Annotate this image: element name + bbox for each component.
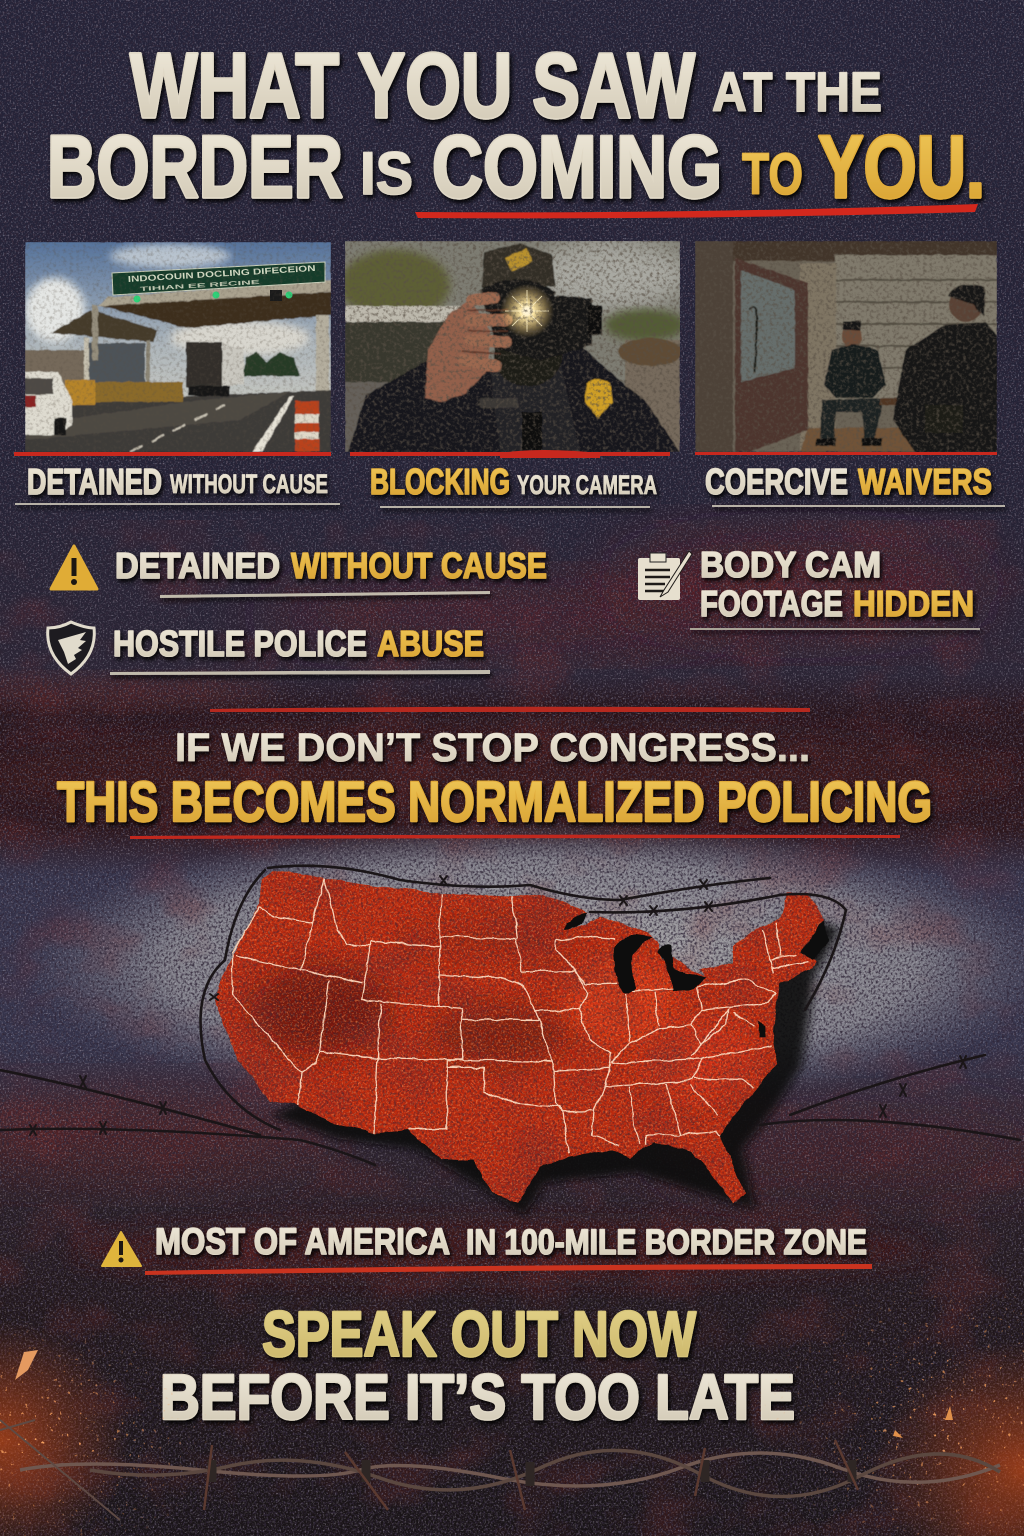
panel: agent blocking camera photo — [340, 240, 690, 452]
seated officer — [842, 329, 862, 347]
caption: coercive waivers: WAIVERS — [858, 461, 992, 502]
standing officer — [948, 296, 982, 322]
jacket — [348, 345, 680, 452]
warning banner — [57, 707, 932, 839]
map: United States with state lines — [0, 860, 1020, 1216]
call to action — [160, 1298, 795, 1433]
pickup — [25, 372, 72, 435]
caption: coercive waivers — [705, 461, 1005, 507]
call to action: SPEAK OUT NOW — [262, 1298, 696, 1370]
icon: clipboard — [638, 551, 692, 600]
title: BORDER — [47, 117, 343, 216]
door — [695, 241, 733, 452]
caption: detained without cause: WITHOUT CAUSE — [170, 469, 328, 499]
caption: coercive waivers: COERCIVE — [705, 461, 848, 502]
panel: border checkpoint photo: TIHIAN EE RECINE — [140, 280, 260, 293]
icon: warning triangle — [51, 546, 97, 589]
barriers — [95, 382, 183, 402]
left building — [25, 349, 85, 386]
caption: detained without cause: DETAINED — [27, 461, 162, 502]
icon: warning triangle small — [102, 1232, 141, 1266]
callout: 100-mile border zone: MOST OF AMERICA — [155, 1221, 450, 1262]
panel: border checkpoint photo — [25, 242, 331, 452]
item: hostile police abuse: ABUSE — [377, 623, 484, 664]
panel: border checkpoint photo: INDOCOUIN DOCLING DIFECEION — [128, 263, 316, 284]
road — [25, 390, 331, 452]
barbed wire footer — [0, 1420, 1000, 1520]
item: body cam footage hidden: FOOTAGE — [700, 583, 843, 624]
barrel — [295, 401, 319, 452]
warning banner: IF WE DON’T STOP CONGRESS... — [175, 726, 810, 770]
caption: blocking your camera: YOUR CAMERA — [517, 470, 657, 500]
trees — [243, 352, 300, 376]
callout: 100-mile border zone: IN 100-MILE BORDER ZONE — [466, 1223, 867, 1262]
caption: blocking your camera — [370, 461, 657, 508]
fire embers — [0, 1250, 1024, 1536]
sign — [112, 262, 325, 295]
great lakes — [564, 913, 830, 1037]
face and cap — [494, 348, 561, 386]
call to action: BEFORE IT’S TOO LATE — [160, 1361, 795, 1433]
camera — [489, 295, 592, 350]
caption: detained without cause — [15, 461, 340, 505]
red rules under photos — [14, 450, 997, 458]
barbed wire around map — [0, 866, 1020, 1165]
hand — [425, 300, 490, 402]
item: hostile police abuse — [110, 623, 490, 675]
callout: 100-mile border zone — [102, 1221, 872, 1275]
item: detained without cause: DETAINED — [115, 545, 280, 586]
map shadow — [272, 909, 840, 1216]
title: WHAT YOU SAW — [130, 35, 695, 137]
title: AT THE — [712, 60, 882, 123]
truck — [186, 342, 222, 387]
item: body cam footage hidden: HIDDEN — [853, 583, 974, 624]
item: detained without cause: WITHOUT CAUSE — [291, 545, 547, 586]
title: TO — [742, 142, 803, 207]
badge — [585, 380, 613, 418]
title: COMING — [432, 117, 722, 216]
canopy — [98, 292, 331, 328]
caption: blocking your camera: BLOCKING — [370, 461, 510, 502]
item: detained without cause — [115, 545, 547, 598]
icon: shield — [48, 622, 94, 674]
floor — [800, 426, 915, 452]
panel: coercive waivers photo — [695, 241, 997, 452]
state lines — [232, 878, 809, 1153]
item: hostile police abuse: HOSTILE POLICE — [113, 623, 367, 664]
title — [47, 35, 985, 216]
item: body cam footage hidden: BODY CAM — [700, 544, 881, 585]
item: body cam footage hidden — [690, 544, 980, 630]
title: IS — [360, 140, 413, 207]
